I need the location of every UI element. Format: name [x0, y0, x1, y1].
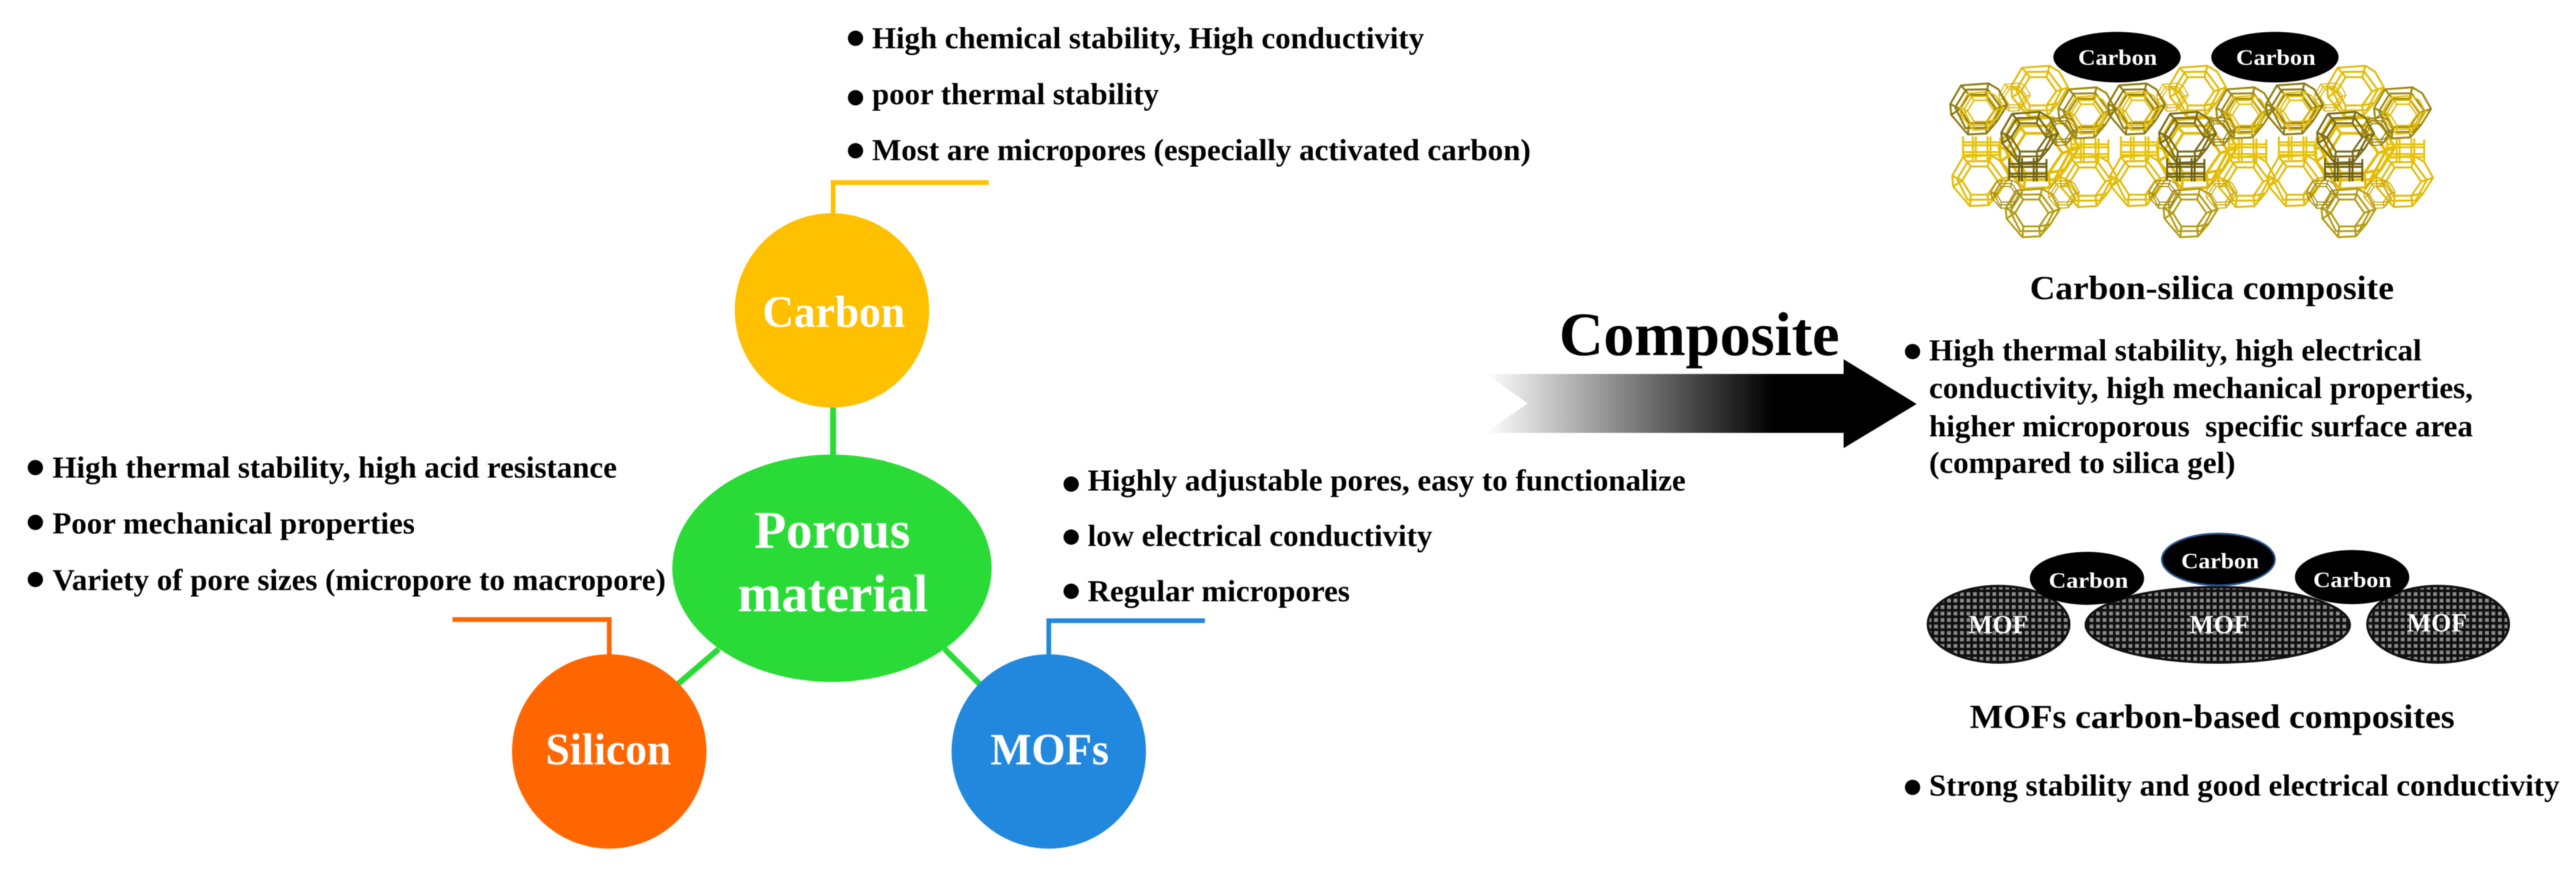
icon: MOF particle right: MOF	[2407, 608, 2467, 637]
icon: carbon particle left: Carbon	[2078, 46, 2157, 70]
panel: MOF carbon illustration	[1928, 534, 2509, 663]
icon: carbon particle left: Carbon	[2049, 569, 2128, 593]
icon: carbon particle right	[2295, 550, 2409, 604]
icon: MOF particle right	[2367, 586, 2509, 663]
icon: carbon particle middle: Carbon	[2181, 549, 2259, 574]
silicon circle	[512, 654, 706, 849]
icon: MOF particle middle: MOF	[2189, 610, 2250, 639]
MOFs leader line	[1049, 621, 1205, 656]
panel: porous material hub	[672, 455, 992, 682]
text block: silicon properties: High thermal stability, high acid resistance	[52, 451, 617, 485]
text block: carbon properties: poor thermal stability	[872, 78, 1159, 111]
porous ellipse	[672, 455, 992, 682]
icon: MOF particle left	[1928, 586, 2069, 663]
silicon leader line	[453, 620, 609, 656]
text block: carbon-silica composite properties: higher microporous specific surface area	[1929, 410, 2473, 443]
connector lines between porous material and branches	[678, 406, 980, 684]
panel: MOFs node	[952, 621, 1205, 849]
icon: carbon particle left	[2030, 552, 2144, 605]
panel: carbon-silica framework illustration	[1950, 32, 2433, 237]
text block: MOF composite properties: Strong stability and good electrical conductivity	[1929, 769, 2560, 803]
icon: carbon particle right: Carbon	[2313, 568, 2392, 592]
text block: MOFs properties: low electrical conductivity	[1088, 519, 1432, 553]
porous label line 1: Porous	[754, 501, 910, 559]
text block: silicon properties: Variety of pore sizes (micropore to macropore)	[52, 564, 666, 597]
text block: MOFs properties	[1064, 464, 1686, 608]
MOFs label: MOFs	[990, 725, 1109, 774]
icon: carbon particle right	[2211, 32, 2339, 82]
heading: Composite: Composite	[1559, 300, 1839, 369]
text block: silicon properties: Poor mechanical properties	[52, 507, 415, 541]
text block: carbon properties: High chemical stability, High conductivity	[872, 22, 1424, 55]
icon: carbon particle middle	[2162, 534, 2275, 585]
icon: MOF particle middle	[2086, 587, 2350, 663]
icon: silica framework	[1950, 66, 2433, 237]
carbon label: Carbon	[762, 287, 905, 337]
silicon label: Silicon	[546, 725, 671, 774]
carbon circle	[735, 213, 929, 408]
heading: carbon-silica composite: Carbon-silica composite	[2030, 270, 2394, 307]
text block: carbon-silica composite properties	[1905, 334, 2473, 480]
arrow: gradient composite arrow	[1485, 359, 1917, 448]
text block: silicon properties	[28, 451, 666, 597]
text block: carbon-silica composite properties: High thermal stability, high electrical	[1929, 334, 2422, 367]
icon: carbon particle right: Carbon	[2236, 46, 2316, 70]
porous label line 2: material	[738, 565, 928, 623]
heading: MOFs carbon-based composites: MOFs carbon-based composites	[1970, 698, 2455, 736]
text block: carbon properties: Most are micropores (especially activated carbon)	[872, 134, 1531, 167]
text block: carbon properties	[848, 22, 1531, 167]
panel: carbon node	[735, 183, 989, 408]
text block: MOFs properties: Highly adjustable pores, easy to functionalize	[1088, 464, 1686, 498]
panel: silicon node	[453, 620, 706, 849]
text block: carbon-silica composite properties: (compared to silica gel)	[1929, 446, 2235, 480]
text block: MOFs properties: Regular micropores	[1088, 575, 1350, 608]
icon: MOF particle left: MOF	[1969, 610, 2028, 639]
MOFs circle	[952, 654, 1146, 849]
icon: carbon particle left	[2053, 32, 2181, 82]
text block: carbon-silica composite properties: conductivity, high mechanical properties,	[1929, 372, 2473, 405]
carbon leader line	[833, 183, 989, 215]
